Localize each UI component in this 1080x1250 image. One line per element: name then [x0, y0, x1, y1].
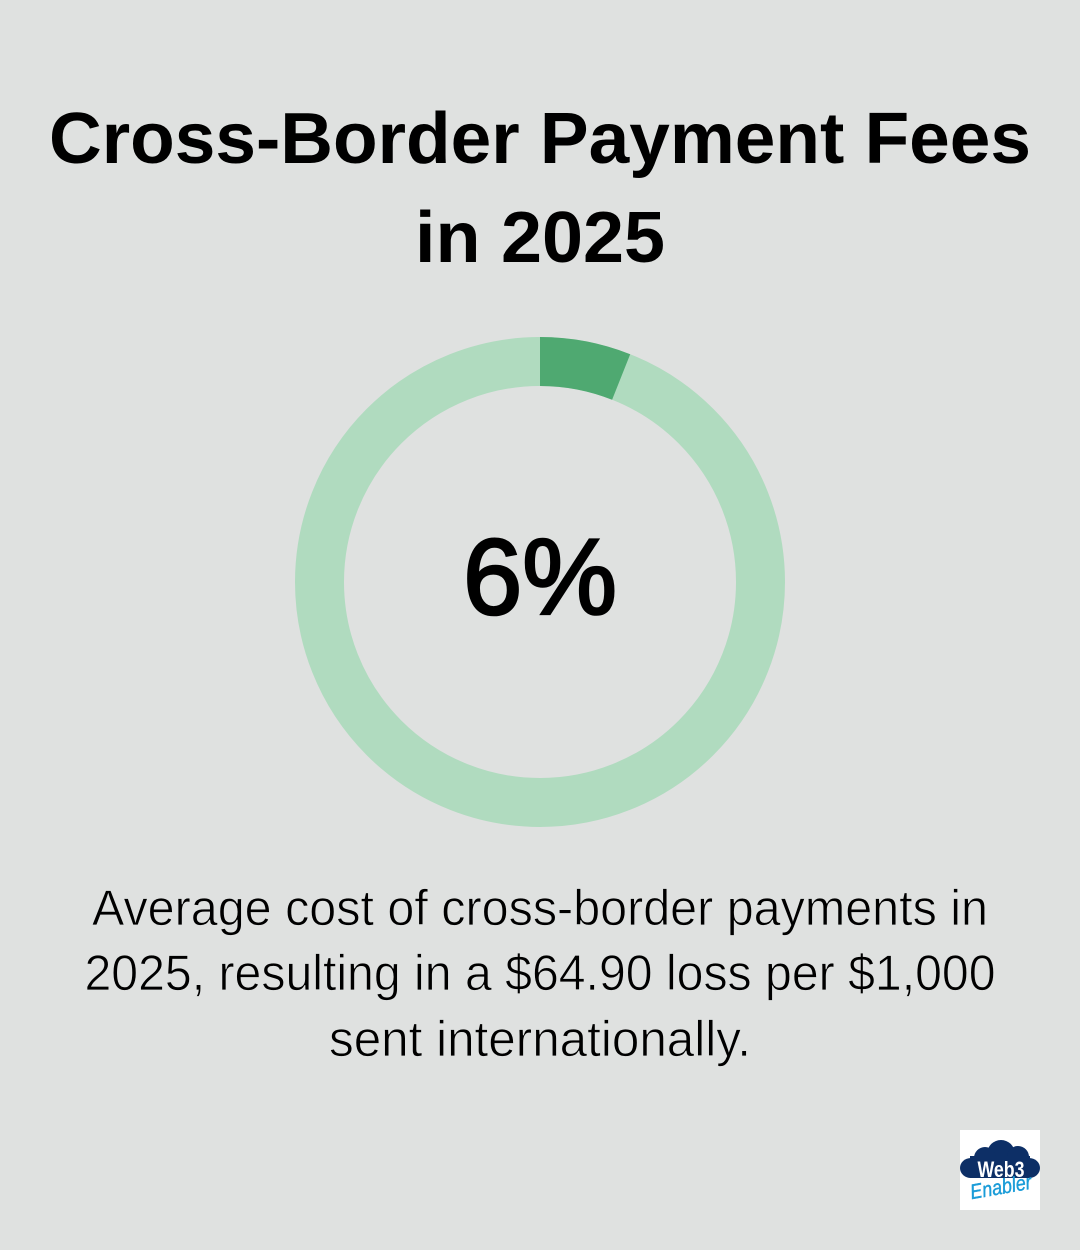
title: in 2025 [415, 198, 665, 278]
logo background [960, 1130, 1040, 1210]
title [49, 99, 1031, 278]
description text: sent internationally. [329, 1011, 751, 1067]
logo: Web3 Enabler [960, 1130, 1040, 1210]
logo script: Enabler [968, 1171, 1034, 1204]
description text: 2025, resulting in a $64.90 loss per $1,000 [84, 945, 996, 1001]
center value: 6% [463, 516, 617, 637]
title: Cross-Border Payment Fees [49, 99, 1031, 179]
logo wordmark: Web3 [978, 1157, 1024, 1182]
donut segment: 6% [540, 337, 630, 400]
donut chart [320, 337, 760, 802]
description text: Average cost of cross-border payments in [92, 880, 988, 936]
description text [84, 880, 996, 1067]
donut track [320, 362, 760, 802]
logo cloud [960, 1140, 1040, 1178]
